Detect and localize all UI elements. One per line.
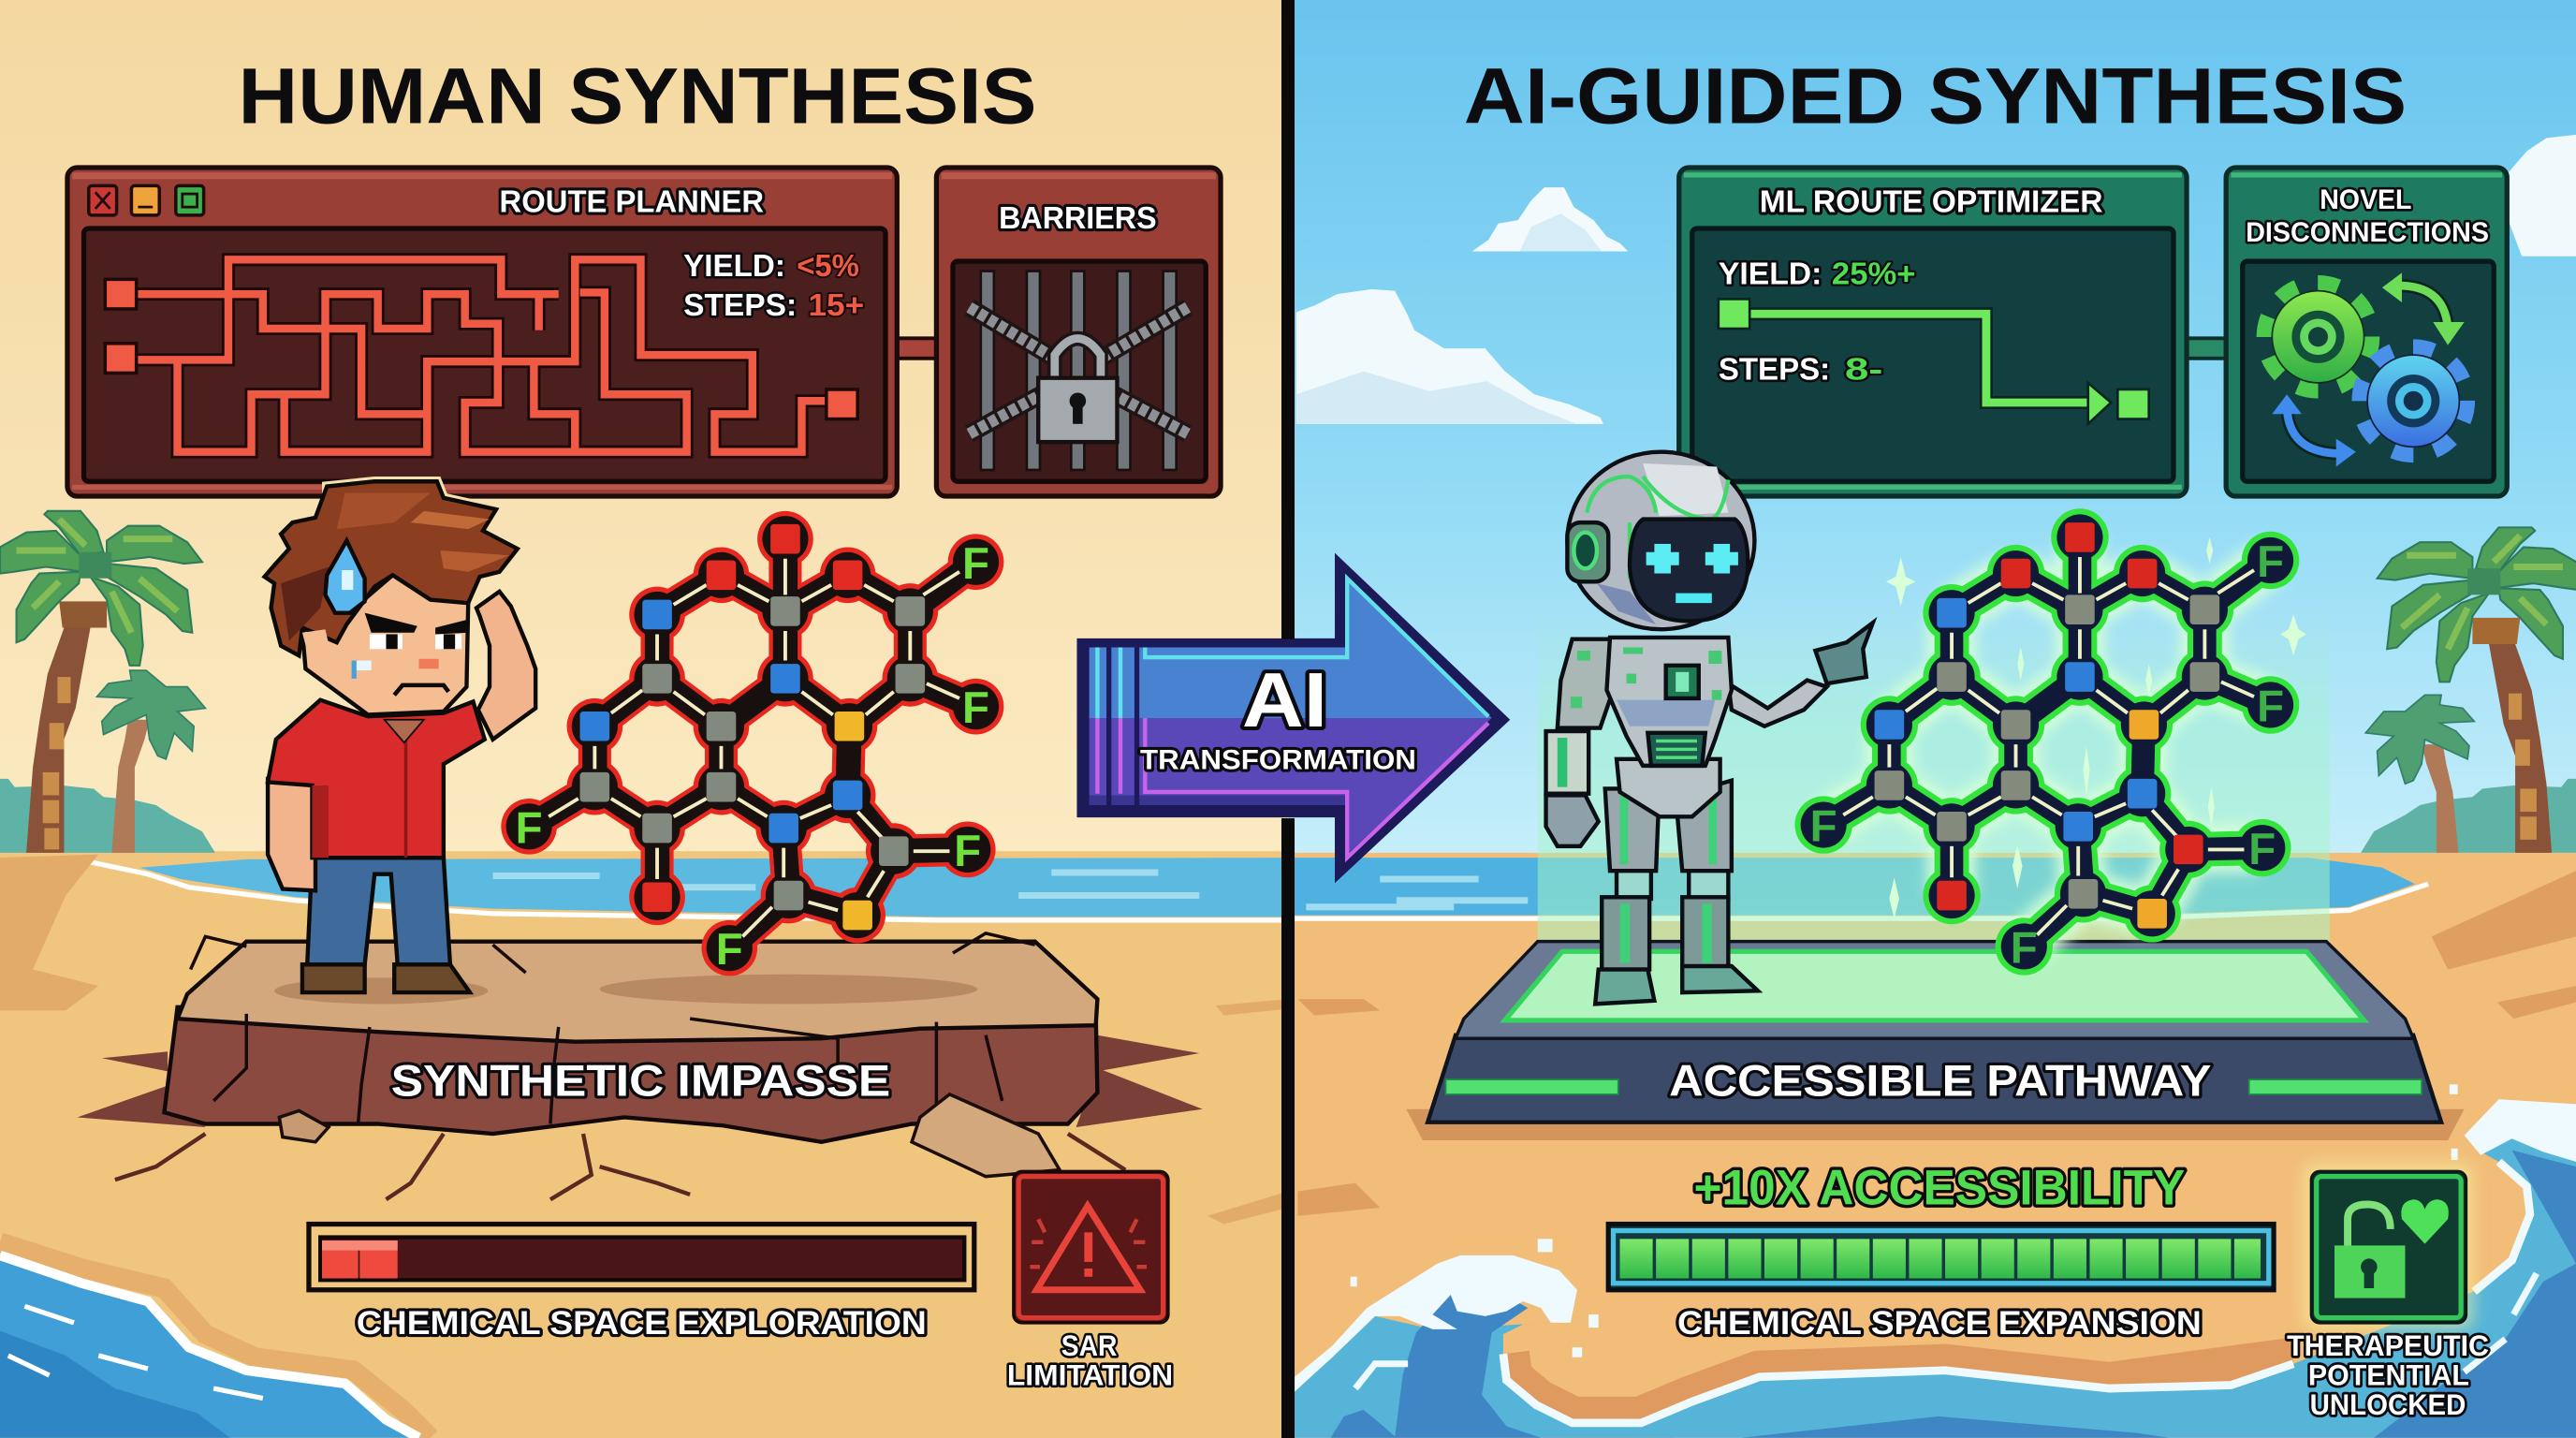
- sea: [1295, 1138, 2576, 1438]
- red shirt: [268, 700, 485, 858]
- brows: [365, 613, 417, 633]
- right sand patches: [1298, 871, 2576, 1216]
- platform label: ACCESSIBLE PATHWAY: [1669, 1057, 2211, 1107]
- left arm: [1558, 639, 1617, 728]
- transformation arrow: [1079, 559, 1506, 877]
- boots: [302, 964, 365, 992]
- nose blush: [419, 659, 439, 668]
- rock cracks: [191, 933, 1035, 1123]
- glowing top panel: [1505, 951, 2364, 1020]
- face: [302, 575, 468, 714]
- smile: [1676, 594, 1712, 603]
- rock top surface: [178, 942, 1097, 1042]
- fluorine labels: F: [962, 683, 989, 733]
- hologram field: [1538, 608, 2330, 945]
- human character: [265, 481, 535, 992]
- icon: blue cycle arrow: [2272, 394, 2356, 466]
- ground cracks: [77, 1035, 1203, 1127]
- left palm tree large: [0, 511, 202, 853]
- icon: green cycle arrow: [2382, 272, 2465, 345]
- arrow label: transformation: TRANSFORMATION: [1140, 744, 1416, 775]
- left ocean strip: [85, 858, 1288, 920]
- right background: blue sky: [1288, 0, 2576, 858]
- sweat drop: [326, 540, 365, 613]
- mouth: [394, 685, 448, 695]
- fluorine labels: F: [954, 827, 981, 876]
- platform label: SYNTHETIC IMPASSE: [391, 1057, 890, 1107]
- icon: therapeutic potential unlocked: [2304, 1164, 2472, 1329]
- fluorine labels: F: [1810, 802, 1837, 852]
- ear ring: [1567, 522, 1608, 581]
- torso: [1606, 638, 1732, 766]
- yield and steps metrics: YIELD:: [1719, 257, 1822, 292]
- progress bar: chemical space exploration: [309, 1225, 974, 1290]
- fluorine labels: F: [2248, 825, 2276, 874]
- icon: sar limitation warning: [1014, 1171, 1168, 1323]
- label: therapeutic potential unlocked: THERAPEUTIC: [2287, 1328, 2489, 1362]
- left hill: [0, 779, 215, 853]
- label: sar limitation: LIMITATION: [1007, 1358, 1173, 1392]
- hair halo: [327, 481, 496, 509]
- glowing eyes: [1647, 552, 1679, 565]
- ml route optimizer panel: 8-: [1845, 352, 1882, 387]
- fluorine labels: [516, 539, 989, 975]
- fluorine labels: F: [962, 539, 989, 589]
- hair: [265, 481, 518, 655]
- novel disconnections panel: [2226, 168, 2507, 496]
- yield and steps metrics: YIELD:: [683, 249, 785, 284]
- foam crest right: [2465, 1099, 2576, 1162]
- label: therapeutic potential unlocked: UNLOCKED: [2310, 1387, 2466, 1421]
- rock platform: synthetic impasse: [77, 933, 1203, 1199]
- legs: [1605, 788, 1660, 871]
- label: chemical space exploration: CHEMICAL SPACE EXPLORATION: [357, 1305, 927, 1342]
- barriers panel: [936, 168, 1221, 496]
- eyes: [370, 634, 402, 649]
- tangled route maze: [137, 259, 827, 452]
- novel disconnections panel: DISCONNECTIONS: [2246, 217, 2489, 248]
- direct optimised route: [1749, 314, 2089, 403]
- right sand: [1288, 853, 2576, 1438]
- label: chemical space expansion: CHEMICAL SPACE EXPANSION: [1677, 1305, 2202, 1342]
- left sand patches: [0, 855, 1288, 1225]
- ear: [302, 629, 333, 670]
- ml route optimizer panel: 25%+: [1832, 257, 1915, 292]
- sand shadow: [1406, 1109, 2465, 1140]
- fluorine labels: F: [2257, 537, 2284, 587]
- dark wave shadow: [1395, 1295, 1541, 1438]
- left background: sandy sky: [0, 0, 1288, 1438]
- label: therapeutic potential unlocked: POTENTIAL: [2308, 1358, 2469, 1392]
- callout: +10x accessibility: +10X ACCESSIBILITY: [1694, 1160, 2185, 1215]
- wet sand band: [1503, 1354, 2293, 1423]
- tech platform: accessible pathway: [1406, 942, 2465, 1140]
- panel title: ML ROUTE OPTIMIZER: [1760, 184, 2103, 219]
- face screen: [1630, 520, 1748, 621]
- label: sar limitation: [1007, 1328, 1173, 1392]
- lowered arm: [268, 779, 315, 890]
- panel title: NOVEL: [2320, 184, 2411, 215]
- arrow label: AI: AI: [1242, 657, 1327, 743]
- jeans: [307, 858, 450, 964]
- route planner panel: <5%: [797, 249, 859, 284]
- fallen boulder: [912, 1094, 1060, 1177]
- platform front: [1427, 1035, 2441, 1123]
- right palm tree small: [2365, 695, 2474, 862]
- fluorine labels: F: [2011, 923, 2038, 973]
- label: therapeutic potential unlocked: [2287, 1328, 2489, 1421]
- tear: [352, 661, 372, 670]
- ml route optimizer panel: [1679, 168, 2228, 496]
- sparkles: [1886, 537, 2306, 918]
- fluorine labels: F: [716, 925, 743, 975]
- panel title: BARRIERS: [999, 201, 1157, 236]
- robot character: [1546, 452, 1873, 1004]
- ml route optimizer panel: STEPS:: [1719, 352, 1830, 387]
- right ocean strip: [1295, 858, 2428, 918]
- window buttons: [89, 185, 204, 215]
- side light bars: [1445, 1079, 2422, 1094]
- icon: barred gate with chains and padlock: [970, 271, 1188, 470]
- head: [1567, 452, 1754, 629]
- route planner panel: 15+: [809, 288, 864, 323]
- right bottom waves: [1295, 1084, 2576, 1438]
- center divider top: [1281, 0, 1295, 639]
- title: human synthesis: HUMAN SYNTHESIS: [238, 52, 1036, 140]
- fluorine labels: F: [516, 803, 543, 853]
- icon: blue gear: [2363, 350, 2465, 452]
- right clouds: [1296, 135, 2576, 424]
- platform top: [1456, 942, 2413, 1038]
- right arm pointing: [1728, 681, 1827, 726]
- pelvis: [1617, 759, 1720, 816]
- left palm tree small: [97, 670, 205, 853]
- left bottom shoreline wave: [0, 1242, 431, 1438]
- fluorine labels: [1810, 537, 2284, 973]
- left molecule: [516, 524, 989, 975]
- title: ai-guided synthesis: AI-GUIDED SYNTHESIS: [1464, 52, 2407, 140]
- rock front face: [165, 1007, 1097, 1142]
- route planner panel: [67, 168, 938, 496]
- route planner panel: STEPS:: [683, 288, 797, 323]
- fluorine labels: F: [2257, 682, 2284, 731]
- label: sar limitation: SAR: [1061, 1328, 1118, 1362]
- icon: green gear: [2267, 286, 2369, 388]
- raised arm: [476, 592, 535, 740]
- right molecule with neon glow: [1810, 522, 2306, 973]
- right palm tree large: [2378, 527, 2576, 869]
- center divider bottom: [1281, 818, 1295, 1438]
- progress bar: chemical space expansion: [1608, 1225, 2274, 1290]
- panel title: ROUTE PLANNER: [500, 184, 764, 219]
- foam crest left: [1295, 1255, 1577, 1392]
- right hill: [2361, 779, 2576, 853]
